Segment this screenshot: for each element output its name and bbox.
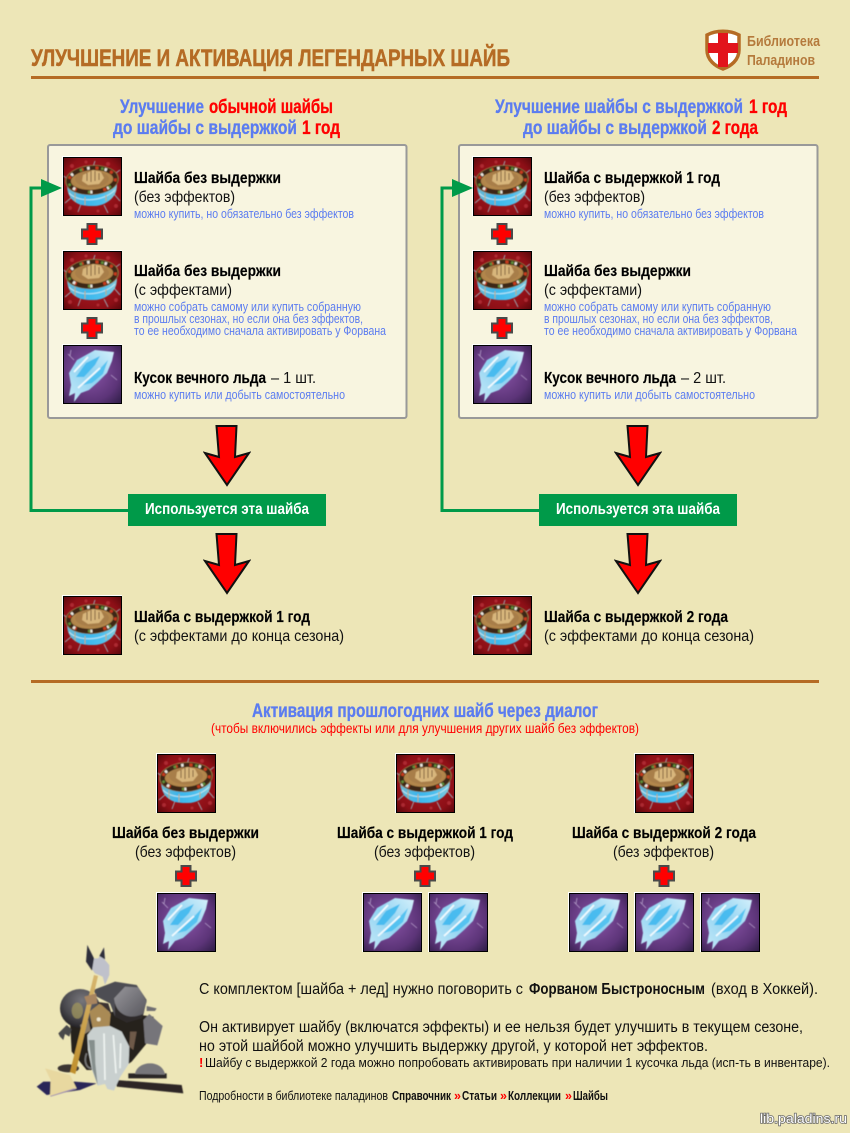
item text: ice x1: – 1 шт. <box>271 370 316 387</box>
badge: left used puck <box>128 494 326 526</box>
heading: activation: (чтобы включились эффекты или для улучшения других шайб без эффектов) <box>211 721 639 736</box>
result: left <box>62 595 344 655</box>
icon: puck <box>472 250 532 310</box>
badge: right used puck: Используется эта шайба <box>556 501 720 518</box>
arrow: right green loop <box>442 179 539 510</box>
item text: puck without aging, with effects: Шайба без выдержки <box>134 263 281 280</box>
text: instructions: С комплектом [шайба + лед] нужно поговорить с <box>199 981 523 998</box>
item text: ice x2: можно купить или добыть самостоятельно <box>544 387 755 402</box>
item text: puck aged 1 year, no effects: можно купить, но обязательно без эффектов <box>544 206 764 221</box>
heading: right column <box>495 97 787 139</box>
item text: ice x2: Кусок вечного льда <box>544 370 676 387</box>
item text: puck aged 1 year, no effects: (без эффектов) <box>544 189 645 206</box>
text: footer breadcrumbs: Справочник <box>392 1089 452 1103</box>
result: right <box>472 595 754 655</box>
item text: puck without aging, with effects: то ее необходимо сначала активировать у Форвана <box>134 323 387 338</box>
heading: right column: до шайбы с выдержкой <box>523 118 707 139</box>
icon: ice <box>62 344 122 404</box>
item text: puck without aging, with effects <box>544 263 798 338</box>
text: footer breadcrumbs: » <box>454 1089 461 1103</box>
item text: ice x1: можно купить или добыть самостоятельно <box>134 387 345 402</box>
icon: plus <box>82 224 102 244</box>
activation: aged 2 years: (без эффектов) <box>613 844 714 861</box>
icon: plus <box>492 224 512 244</box>
icon: puck <box>62 250 122 310</box>
text: footer breadcrumbs: Статьи <box>462 1089 497 1103</box>
arrow: left red 2 <box>205 534 249 593</box>
item text: puck without aging, with effects: можно собрать самому или купить собранную <box>544 299 771 314</box>
item text: puck aged 1 year, no effects: Шайба с выдержкой 1 год <box>544 170 720 187</box>
item text: puck without aging, no effects: (без эффектов) <box>134 189 235 206</box>
text: instructions: но этой шайбой можно улучшить выдержку другой, у которой нет эффектов. <box>199 1038 708 1055</box>
logo: Библиотека Паладинов: Паладинов <box>747 53 815 69</box>
heading: left column: до шайбы с выдержкой <box>113 118 297 139</box>
item text: puck without aging, no effects: можно купить, но обязательно без эффектов <box>134 206 354 221</box>
logo: Библиотека Паладинов: Библиотека <box>747 34 821 50</box>
result: right: (с эффектами до конца сезона) <box>544 628 754 645</box>
activation: aged 1 year <box>337 753 513 952</box>
item text: ice x2: – 2 шт. <box>681 370 726 387</box>
result: left: (с эффектами до конца сезона) <box>134 628 344 645</box>
icon: ice <box>472 344 532 404</box>
item text: puck without aging, with effects: то ее необходимо сначала активировать у Форвана <box>544 323 798 338</box>
text: footer breadcrumbs: » <box>565 1089 572 1103</box>
arrow: left red 1 <box>205 426 249 485</box>
item text: puck without aging, with effects: (с эффектами) <box>544 282 642 299</box>
item text: puck without aging, no effects: Шайба без выдержки <box>134 170 281 187</box>
heading: left column: 1 год <box>302 118 340 139</box>
logo: Библиотека Паладинов <box>707 31 821 69</box>
heading: activation <box>211 701 639 736</box>
item text: ice x1 <box>134 370 345 402</box>
badge: right used puck <box>539 494 737 526</box>
item text: puck without aging, no effects <box>134 170 354 221</box>
heading: left column: Улучшение <box>120 97 204 118</box>
result: left: Шайба с выдержкой 1 год <box>134 609 310 626</box>
text: instructions: Он активирует шайбу (включатся эффекты) и ее нельзя будет улучшить в текущем сезоне, <box>199 1019 803 1036</box>
activation: aged 1 year: Шайба с выдержкой 1 год <box>337 825 513 842</box>
heading: left column <box>113 97 340 139</box>
icon: puck <box>62 156 122 216</box>
arrow: right red 1 <box>616 426 660 485</box>
item text: puck without aging, with effects: Шайба без выдержки <box>544 263 691 280</box>
item text: ice x1: Кусок вечного льда <box>134 370 266 387</box>
item text: puck without aging, with effects: (с эффектами) <box>134 282 232 299</box>
text: footer breadcrumbs <box>199 1089 608 1103</box>
title: УЛУЧШЕНИЕ И АКТИВАЦИЯ ЛЕГЕНДАРНЫХ ШАЙБ <box>31 44 510 72</box>
text: instructions: ! <box>199 1055 203 1070</box>
text: footer breadcrumbs: Коллекции <box>508 1089 561 1103</box>
text: instructions <box>199 981 830 1070</box>
text: footer breadcrumbs: Шайбы <box>573 1089 608 1103</box>
icon: plus <box>492 318 512 338</box>
text: instructions: Форваном Быстроносным <box>529 981 705 998</box>
item text: puck without aging, with effects: в прошлых сезонах, но если она без эффектов, <box>544 311 773 326</box>
item text: ice x2 <box>544 370 755 402</box>
heading: activation: Активация прошлогодних шайб через диалог <box>252 701 598 722</box>
result: right: Шайба с выдержкой 2 года <box>544 609 728 626</box>
activation: no aging <box>112 753 259 952</box>
activation: no aging: (без эффектов) <box>135 844 236 861</box>
arrow: right red 2 <box>616 534 660 593</box>
item text: puck without aging, with effects: в прошлых сезонах, но если она без эффектов, <box>134 311 363 326</box>
title <box>31 44 819 79</box>
heading: left column: обычной шайбы <box>209 97 333 118</box>
arrow: left green loop <box>31 179 128 510</box>
panel: right ingredients <box>459 145 818 418</box>
text: instructions: (вход в Хоккей). <box>711 981 818 998</box>
panel: left ingredients <box>48 145 406 418</box>
watermark: lib.paladins.ru <box>760 1111 847 1126</box>
heading: right column: 1 год <box>749 97 787 118</box>
activation: aged 2 years <box>568 753 760 952</box>
heading: right column: 2 года <box>712 118 758 139</box>
item text: puck without aging, with effects: можно собрать самому или купить собранную <box>134 299 361 314</box>
activation: aged 1 year: (без эффектов) <box>374 844 475 861</box>
item text: puck aged 1 year, no effects <box>544 170 764 221</box>
icon: plus <box>82 318 102 338</box>
illustration: dwarf with axe <box>37 945 183 1097</box>
text: footer breadcrumbs: » <box>500 1089 507 1103</box>
item text: puck without aging, with effects <box>134 263 387 338</box>
text: footer breadcrumbs: Подробности в библиотеке паладинов <box>199 1089 388 1103</box>
activation: no aging: Шайба без выдержки <box>112 825 259 842</box>
badge: left used puck: Используется эта шайба <box>145 501 309 518</box>
activation: aged 2 years: Шайба с выдержкой 2 года <box>572 825 756 842</box>
icon: puck <box>472 156 532 216</box>
heading: right column: Улучшение шайбы с выдержкой <box>495 97 743 118</box>
